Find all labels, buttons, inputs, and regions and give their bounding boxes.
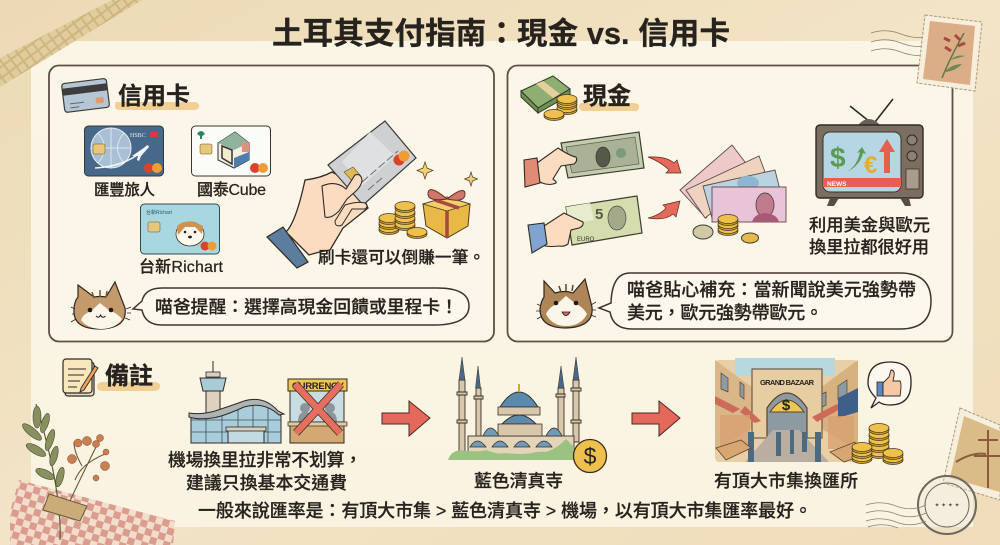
arrow: mosque to bazaar <box>632 401 680 436</box>
text: airport advice: 機場換里拉非常不划算， <box>168 449 362 470</box>
decoration: bottom-left botanical and gingham tape <box>10 404 175 545</box>
illustration: gift box <box>423 190 470 238</box>
illustration: news TV: $ <box>830 142 846 173</box>
heading: cash: 現金 <box>583 82 631 110</box>
illustration: Grand Bazaar: GRAND BAZAAR <box>760 378 815 387</box>
title: 土耳其支付指南：現金 vs. 信用卡 <box>272 17 730 51</box>
icon: notepad and pencil <box>63 359 98 396</box>
label: 匯豐旅人 <box>94 181 155 199</box>
illustration: Blue Mosque <box>448 357 581 460</box>
decoration: bottom-right stamp and postmark <box>866 408 1000 534</box>
text: Grand Bazaar exchange: 有頂大市集換匯所 <box>714 471 858 491</box>
illustration: Grand Bazaar <box>715 358 858 462</box>
illustration: coin stacks <box>852 424 903 464</box>
panel: credit card <box>49 66 494 342</box>
illustration: coins <box>379 202 427 238</box>
illustration: hand holding card <box>267 121 416 268</box>
illustration: hand with euro: EURO <box>577 237 595 243</box>
heading: credit card: 信用卡 <box>118 83 190 110</box>
decoration: top-right stamp and postmark <box>871 15 982 91</box>
card: HSBC: HSBC <box>130 133 146 139</box>
icon: happy cat <box>536 279 596 328</box>
illustration: hand with US dollar <box>524 132 644 187</box>
text: use USD and EUR: 換里拉都很好用 <box>809 237 929 257</box>
speech bubble: cash tip <box>599 273 931 329</box>
text: airport advice: 建議只換基本交通費 <box>186 473 347 493</box>
label: 台新Richart <box>139 257 224 276</box>
label: 國泰Cube <box>197 181 266 199</box>
illustration: hand with euro <box>528 196 642 253</box>
card: Richart <box>139 204 224 276</box>
illustration: Turkish lira notes <box>680 145 786 222</box>
text: blue mosque: 藍色清真寺 <box>474 471 563 491</box>
icon: credit card <box>61 78 110 113</box>
icon: dollar coin <box>574 440 606 472</box>
arrow: euro to lira <box>648 201 680 219</box>
card: Cathay Cube <box>192 126 270 199</box>
illustration: hand with euro: 5 <box>595 206 603 223</box>
icon: dollar coin: $ <box>584 443 597 469</box>
text: airport advice <box>168 449 362 493</box>
text: exchange rate summary: 一般來說匯率是：有頂大市集 > 藍色清真寺 > 機場，以有頂大市集匯率最好。 <box>198 501 812 521</box>
decoration: bottom-right stamp and postmark: ✦ ✦ ✦ ✦ <box>934 502 960 509</box>
speech bubble: credit card tip <box>133 288 469 325</box>
arrow: airport to mosque <box>382 401 430 436</box>
speech bubble: cash tip: 美元，歐元強勢帶歐元。 <box>627 303 823 323</box>
panel: cash <box>508 66 952 342</box>
illustration: currency booth crossed out: CURRENCY <box>292 381 345 392</box>
section: notes <box>63 357 911 521</box>
illustration: news TV <box>816 99 923 206</box>
text: use USD and EUR <box>809 215 930 257</box>
illustration: coins under lira <box>693 214 758 243</box>
icon: sparkles <box>417 162 478 186</box>
illustration: Grand Bazaar: $ <box>782 397 791 414</box>
arrow: dollar to lira <box>648 157 681 173</box>
speech bubble: credit card tip: 喵爸提醒：選擇高現金回饋或里程卡！ <box>155 297 458 317</box>
icon: cash stack <box>521 76 577 120</box>
text: earn with card: 刷卡還可以倒賺一筆。 <box>318 247 485 267</box>
text: use USD and EUR: 利用美金與歐元 <box>809 215 930 235</box>
card: HSBC <box>84 126 164 199</box>
card: Richart: 台新Richart <box>146 209 172 216</box>
heading: notes: 備註 <box>105 363 153 390</box>
illustration: airport <box>189 361 284 443</box>
decoration: top-left washi tape <box>0 0 142 87</box>
icon: cat <box>71 282 131 329</box>
speech bubble: cash tip: 喵爸貼心補充：當新聞說美元強勢帶 <box>627 280 916 300</box>
icon: thumbs up bubble <box>868 362 911 408</box>
illustration: currency booth crossed out <box>288 379 347 443</box>
illustration: news TV: € <box>864 152 877 179</box>
illustration: news TV: NEWS <box>827 181 847 188</box>
